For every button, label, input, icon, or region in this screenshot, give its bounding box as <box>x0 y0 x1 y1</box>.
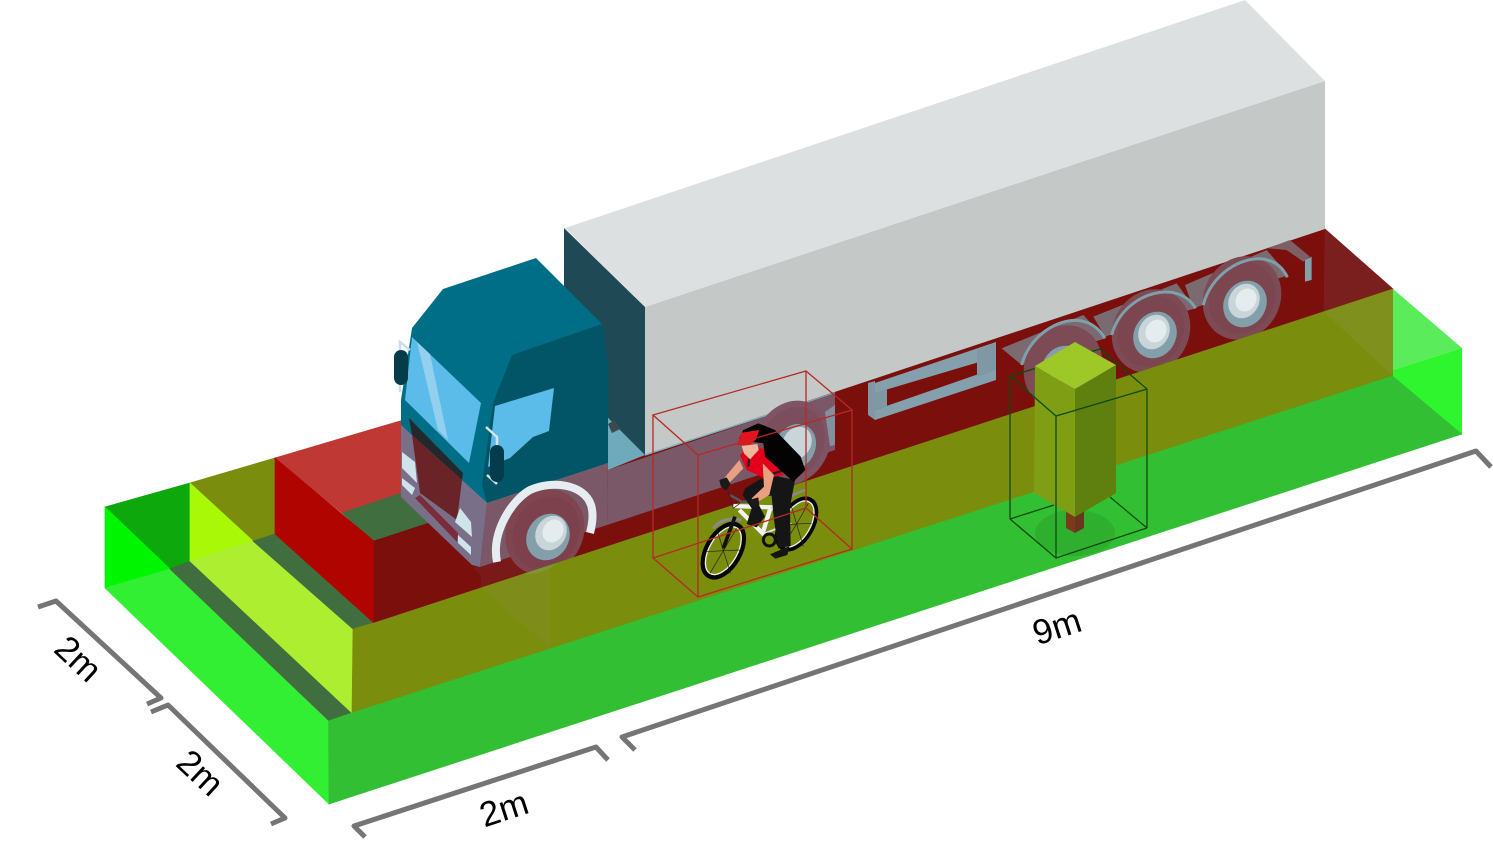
dimension bracket: 9m length: 9m <box>1028 601 1086 653</box>
rear wheel 2 <box>1097 275 1205 387</box>
chassis side <box>607 393 835 525</box>
front bike wheel <box>694 517 752 584</box>
middle wheel <box>738 386 846 500</box>
dimension bracket: left 2m upper: 2m <box>47 628 109 690</box>
rear bike wheel <box>769 490 825 556</box>
front wheel <box>490 475 600 589</box>
backpack <box>739 423 805 482</box>
tree wireframe back edges <box>1010 349 1147 528</box>
bike frame <box>728 492 790 546</box>
mudguard panels <box>1002 240 1312 365</box>
mudguard arcs <box>1022 259 1287 365</box>
side guard rail <box>868 342 996 420</box>
rear wheel 1 <box>1009 311 1117 423</box>
windshield <box>405 337 481 463</box>
rear wheels <box>1009 242 1296 423</box>
right mirror <box>486 427 504 484</box>
dimension bracket: 9m length <box>622 451 1491 750</box>
dimension bracket: left 2m lower <box>151 705 285 824</box>
side window <box>488 388 554 467</box>
rider arms <box>719 460 774 508</box>
truck <box>394 0 1325 589</box>
headlights <box>402 452 472 555</box>
rider torso <box>740 448 784 478</box>
olive cycle lane front face <box>352 289 1393 713</box>
road zones base: left end and back faces <box>105 418 480 804</box>
tree wireframe front edges <box>1010 376 1147 558</box>
dimension bracket: front 2m <box>354 747 608 837</box>
backpack straps <box>748 452 784 477</box>
cargo box <box>564 0 1325 470</box>
grille <box>409 418 463 542</box>
cab <box>394 258 608 567</box>
dark red truck lane <box>374 229 1393 623</box>
dimension bracket: left 2m upper <box>38 601 161 704</box>
rider legs <box>743 475 795 559</box>
helmet <box>737 430 759 445</box>
tree <box>1034 342 1116 556</box>
green footpath front and right faces <box>328 289 1462 804</box>
left mirror <box>394 342 410 392</box>
cyclist <box>694 423 825 584</box>
dimension bracket: front 2m: 2m <box>475 783 533 835</box>
cyclist wireframe bounding box <box>653 371 852 597</box>
rear wheel 3 <box>1188 242 1296 354</box>
rider face <box>742 444 759 459</box>
dimension bracket: left 2m lower: 2m <box>169 742 231 804</box>
